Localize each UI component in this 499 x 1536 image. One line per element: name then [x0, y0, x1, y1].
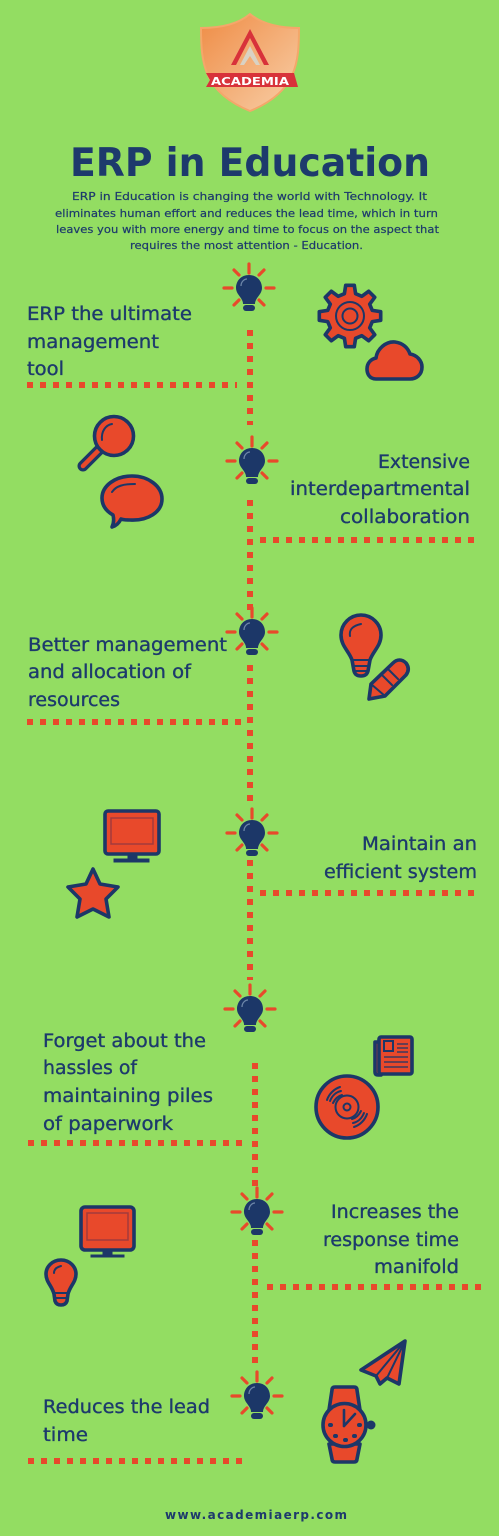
icon: wristwatch: [323, 1387, 376, 1462]
icon: large light bulb: [341, 615, 381, 676]
icon: disc: [316, 1076, 378, 1138]
bulb marker 1: [224, 264, 274, 311]
icon: small light bulb: [46, 1260, 76, 1305]
icon: newspaper: [375, 1037, 412, 1075]
timeline dotted lines: [27, 330, 482, 1461]
text: item 7: time: [43, 1425, 88, 1446]
icon: gear: [319, 285, 381, 347]
text: item 6: [323, 1202, 459, 1278]
bulb marker 4: [227, 809, 277, 856]
icon: star: [68, 869, 118, 917]
icon: speech bubble: [102, 476, 162, 527]
text: item 1: [27, 304, 192, 380]
intro paragraph: ERP in Education is changing the world with Technology. It: [72, 190, 428, 203]
text: item 4: efficient system: [324, 862, 477, 883]
text: item 7: Reduces the lead: [43, 1397, 210, 1418]
text: item 7: [43, 1397, 210, 1446]
intro paragraph: [55, 190, 440, 252]
text: item 5: hassles of: [43, 1058, 137, 1079]
text: item 2: interdepartmental: [290, 479, 470, 500]
icon: monitor small: [81, 1207, 134, 1257]
text: item 5: [43, 1031, 213, 1135]
footer url: www.academiaerp.com: [165, 1508, 347, 1522]
text: item 3: Better management: [28, 635, 227, 656]
logo: Academia shield: [201, 14, 299, 111]
text: item 6: manifold: [374, 1257, 459, 1278]
text: item 5: maintaining piles: [43, 1086, 213, 1107]
text: item 2: [290, 452, 470, 528]
icon: magnifier: [83, 416, 134, 466]
text: item 2: Extensive: [378, 452, 470, 473]
text: item 3: [28, 635, 227, 711]
icon: cloud: [367, 342, 422, 379]
text: item 3: resources: [28, 690, 120, 711]
icon: pencil: [369, 660, 408, 699]
text: item 1: tool: [27, 359, 64, 380]
text: item 4: [324, 834, 477, 883]
icon: paper plane: [361, 1341, 405, 1384]
text: item 1: management: [27, 332, 159, 353]
text: item 3: and allocation of: [28, 662, 192, 683]
text: item 2: collaboration: [340, 507, 470, 528]
intro paragraph: leaves you with more energy and time to focus on the aspect that: [56, 223, 440, 236]
intro paragraph: eliminates human effort and reduces the lead time, which in turn: [55, 207, 438, 220]
text: item 1: ERP the ultimate: [27, 304, 192, 325]
bulb marker 7: [232, 1372, 282, 1419]
text: item 6: Increases the: [331, 1202, 459, 1223]
text: item 6: response time: [323, 1230, 459, 1251]
bulb marker 3: [227, 608, 277, 655]
bulb marker 5: [225, 985, 275, 1032]
bulb marker 6: [232, 1188, 282, 1235]
logo: Academia shield: ACADEMIA: [211, 76, 290, 88]
title: ERP in Education: [70, 141, 430, 186]
icon: monitor: [105, 811, 159, 862]
intro paragraph: requires the most attention - Education.: [130, 239, 363, 252]
text: item 5: of paperwork: [43, 1114, 173, 1135]
text: item 5: Forget about the: [43, 1031, 206, 1052]
text: item 4: Maintain an: [362, 834, 477, 855]
bulb marker 2: [227, 437, 277, 484]
